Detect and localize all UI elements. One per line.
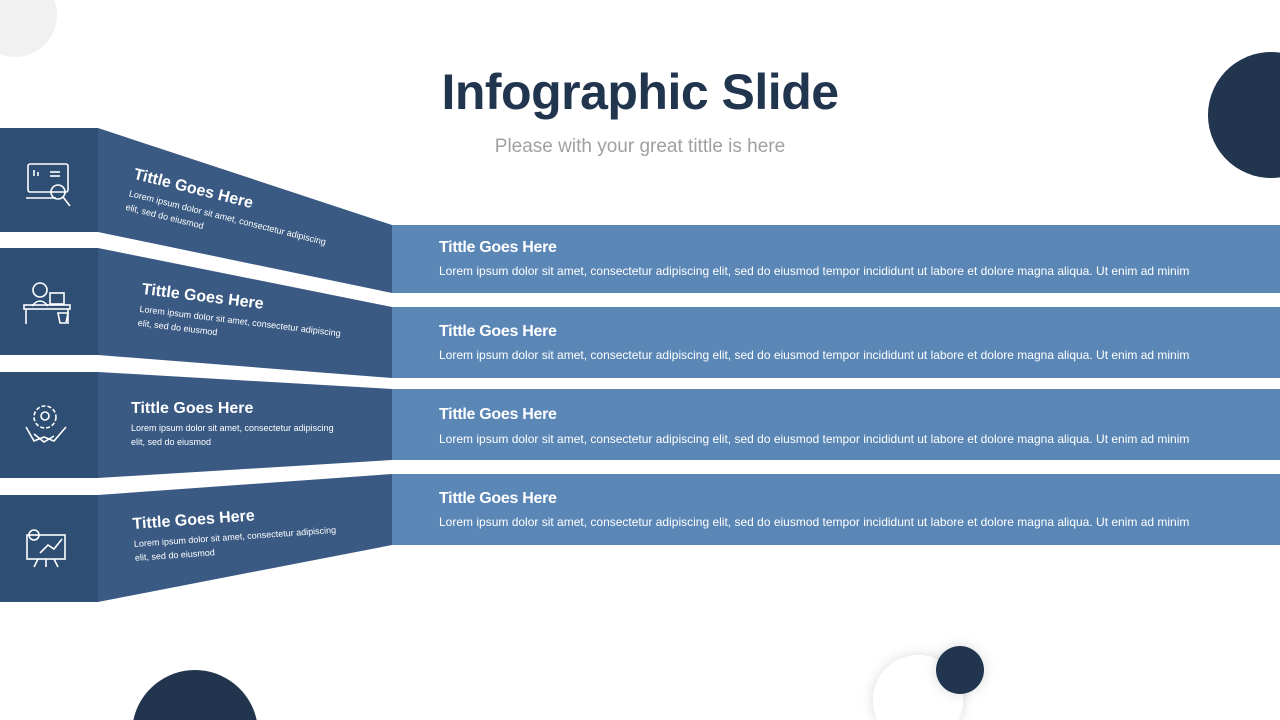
bar 3 (392, 389, 1280, 460)
text 3: Lorem ipsum dolor sit amet, consectetur adipiscing elit, sed do eiusmod (131, 423, 334, 447)
title: Infographic Slide (441, 64, 839, 120)
text 1: Tittle Goes Here (132, 166, 255, 212)
text 2: Tittle Goes Here (141, 281, 265, 313)
text 4 (132, 507, 336, 563)
text 4: Tittle Goes Here (132, 507, 255, 533)
bar 2: Lorem ipsum dolor sit amet, consectetur adipiscing elit, sed do eiusmod tempor incididunt ut labore et dolore magna aliqua. Ut enim ad minim (439, 348, 1189, 362)
bar 3: Tittle Goes Here (439, 406, 557, 423)
icon block 2 (0, 248, 98, 355)
text 1: Lorem ipsum dolor sit amet, consectetur adipiscing elit, sed do eiusmod (125, 188, 327, 247)
bar 4: Lorem ipsum dolor sit amet, consectetur adipiscing elit, sed do eiusmod tempor incididunt ut labore et dolore magna aliqua. Ut enim ad minim (439, 515, 1189, 529)
bar 1: Tittle Goes Here (439, 239, 557, 256)
icon block 3 (0, 372, 98, 478)
bar 2: Tittle Goes Here (439, 323, 557, 340)
trapezoids (98, 128, 392, 602)
subtitle: Please with your great tittle is here (495, 136, 785, 157)
icon block 1 (0, 128, 98, 232)
text 4: Lorem ipsum dolor sit amet, consectetur adipiscing elit, sed do eiusmod (134, 525, 336, 563)
text 3: Tittle Goes Here (131, 400, 253, 417)
icon block 4 (0, 495, 98, 602)
bar 3: Lorem ipsum dolor sit amet, consectetur adipiscing elit, sed do eiusmod tempor incididunt ut labore et dolore magna aliqua. Ut enim ad minim (439, 432, 1189, 446)
text 2 (137, 281, 341, 338)
bar 4 (392, 474, 1280, 545)
text 3 (131, 400, 334, 447)
bar 2 (392, 307, 1280, 378)
bar 1: Lorem ipsum dolor sit amet, consectetur adipiscing elit, sed do eiusmod tempor incididunt ut labore et dolore magna aliqua. Ut enim ad minim (439, 264, 1189, 278)
text 2: Lorem ipsum dolor sit amet, consectetur adipiscing elit, sed do eiusmod (137, 304, 341, 338)
bar 1 (392, 225, 1280, 293)
bar 4: Tittle Goes Here (439, 490, 557, 507)
